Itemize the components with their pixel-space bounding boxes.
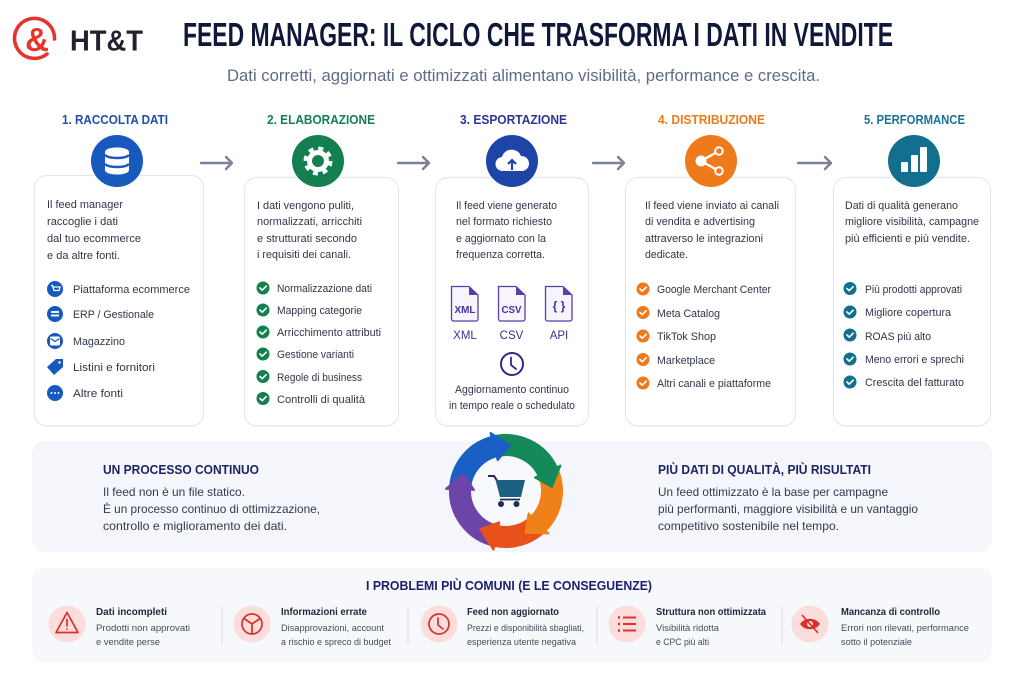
item: informazioni errate: Disapprovazioni, account: [281, 623, 384, 634]
text: description: frequenza corretta.: [456, 249, 545, 261]
list: attività: Controlli di qualità: [277, 394, 366, 406]
list: risultati: Crescita del fatturato: [865, 377, 964, 389]
panel: 1 raccolta dati: [34, 113, 204, 426]
item: informazioni errate: Informazioni errate: [281, 607, 367, 618]
text: più dati di qualità: Un feed ottimizzato è la base per campagne: [658, 485, 888, 499]
list: fonti: Magazzino: [73, 336, 125, 348]
list: fonti: ERP / Gestionale: [73, 309, 154, 321]
heading: step 1: 1. RACCOLTA DATI: [62, 113, 168, 127]
item: feed non aggiornato: [420, 606, 584, 648]
list: fonti: Piattaforma ecommerce: [73, 284, 190, 296]
list: canali: Google Merchant Center: [657, 284, 771, 296]
list: attività: Mapping categorie: [277, 305, 362, 317]
panel: processo continuo: [32, 433, 992, 552]
heading: step 5: 5. PERFORMANCE: [864, 113, 965, 127]
panel: 5 performance: [834, 113, 990, 426]
panel: 4 distribuzione: [626, 113, 796, 426]
list: risultati: Più prodotti approvati: [865, 284, 962, 296]
item: feed non aggiornato: Feed non aggiornato: [467, 607, 559, 618]
subtitle: Dati corretti, aggiornati e ottimizzati alimentano visibilità, performance e crescita.: [227, 67, 820, 85]
list: risultati: Migliore copertura: [865, 307, 952, 319]
list: attività: Normalizzazione dati: [277, 283, 372, 295]
text: description: [645, 200, 779, 261]
text: description: I dati vengono puliti,: [257, 200, 354, 212]
list: canali: [636, 282, 771, 390]
item: struttura non ottimizzata: [608, 606, 766, 648]
text: description: attraverso le integrazioni: [645, 233, 763, 245]
list: fonti: Altre fonti: [73, 388, 123, 400]
text: description: Il feed viene generato: [456, 200, 557, 212]
icon: gear: [292, 135, 344, 187]
text: un processo continuo: [103, 463, 320, 533]
text: description: e aggiornato con la: [456, 233, 547, 245]
item: struttura non ottimizzata: e CPC più alti: [656, 637, 709, 648]
icon: share: [685, 135, 737, 187]
item: dati incompleti: [48, 606, 190, 648]
text: aggiornamento: Aggiornamento continuo: [455, 384, 569, 396]
logo: HT&T: [15, 18, 144, 58]
panel: problemi comuni: [32, 568, 992, 662]
icons: formati file: API: [550, 330, 568, 342]
list: canali: Marketplace: [657, 355, 715, 367]
text: description: dal tuo ecommerce: [47, 233, 141, 245]
text: un processo continuo: È un processo continuo di ottimizzazione,: [103, 502, 320, 516]
icon: ciclo con carrello: [446, 433, 560, 550]
list: canali: Meta Catalog: [657, 308, 720, 320]
heading: step 2: 2. ELABORAZIONE: [267, 113, 375, 127]
icons: formati file: XML: [453, 330, 477, 342]
text: un processo continuo: UN PROCESSO CONTINUO: [103, 463, 259, 477]
text: description: [845, 200, 979, 245]
icons: formati file: [452, 286, 572, 342]
item: mancanza di controllo: sotto il potenziale: [841, 637, 912, 648]
item: dati incompleti: Prodotti non approvati: [96, 623, 190, 634]
list: fonti: Listini e fornitori: [73, 362, 155, 374]
text: description: di vendita e advertising: [645, 216, 755, 228]
item: mancanza di controllo: [792, 606, 969, 648]
text: un processo continuo: Il feed non è un file statico.: [103, 485, 245, 499]
text: description: Il feed manager: [47, 199, 123, 211]
text: più dati di qualità: competitivo sostenibile nel tempo.: [658, 519, 839, 533]
item: informazioni errate: [234, 606, 391, 648]
text: un processo continuo: controllo e miglioramento dei dati.: [103, 519, 287, 533]
text: description: [456, 200, 557, 261]
icon: database: [91, 135, 143, 187]
item: feed non aggiornato: esperienza utente negativa: [467, 637, 577, 648]
icon: cloud upload: [486, 135, 538, 187]
item: informazioni errate: a rischio e spreco di budget: [281, 637, 391, 648]
text: più dati di qualità: PIÙ DATI DI QUALITÀ, PIÙ RISULTATI: [658, 462, 871, 477]
list: risultati: ROAS più alto: [865, 331, 931, 343]
text: description: Dati di qualità generano: [845, 200, 958, 212]
logo: HT&T: &: [25, 21, 49, 58]
icons: formati file: CSV: [502, 304, 522, 316]
list: attività: Gestione varianti: [277, 349, 354, 361]
text: description: raccoglie i dati: [47, 216, 118, 228]
list: risultati: Meno errori e sprechi: [865, 354, 964, 366]
text: description: e da altre fonti.: [47, 250, 120, 262]
flow arrows: [201, 157, 831, 169]
item: struttura non ottimizzata: Struttura non ottimizzata: [656, 607, 766, 618]
icon: clock: [501, 353, 523, 375]
list: attività: Regole di business: [277, 372, 362, 384]
item: mancanza di controllo: Errori non rilevati, performance: [841, 623, 969, 634]
list: risultati: [844, 282, 964, 389]
text: description: nel formato richiesto: [456, 216, 552, 228]
text: aggiornamento: [449, 384, 575, 412]
item: dati incompleti: Dati incompleti: [96, 607, 167, 618]
heading: problemi: I PROBLEMI PIÙ COMUNI (E LE CONSEGUENZE): [366, 578, 652, 593]
text: description: e strutturati secondo: [257, 233, 357, 245]
text: description: Il feed viene inviato ai canali: [645, 200, 779, 212]
list: attività: Arricchimento attributi: [277, 327, 381, 339]
text: description: dedicate.: [645, 249, 688, 261]
text: description: [257, 200, 362, 261]
icons: formati file: { }: [553, 299, 566, 313]
text: description: normalizzati, arricchiti: [257, 216, 362, 228]
text: description: migliore visibilità, campagne: [845, 216, 979, 228]
item: struttura non ottimizzata: Visibilità ridotta: [656, 623, 720, 634]
text: più dati di qualità: più performanti, maggiore visibilità e un vantaggio: [658, 502, 918, 516]
text: più dati di qualità: [658, 462, 918, 533]
list: fonti: [47, 281, 190, 401]
panel: 3 esportazione: [436, 113, 588, 426]
list: attività: [256, 282, 381, 406]
heading: step 4: 4. DISTRIBUZIONE: [658, 113, 765, 127]
logo: HT&T: HT&T: [70, 26, 144, 58]
panel: 2 elaborazione: [244, 113, 398, 426]
icons: formati file: XML: [454, 304, 476, 316]
text: description: i requisiti dei canali.: [257, 249, 351, 261]
text: description: più efficienti e più vendite.: [845, 233, 970, 245]
heading: step 3: 3. ESPORTAZIONE: [460, 113, 567, 127]
item: dati incompleti: e vendite perse: [96, 637, 160, 648]
text: description: [47, 199, 141, 262]
list: canali: TikTok Shop: [657, 331, 716, 343]
item: feed non aggiornato: Prezzi e disponibilità sbagliati,: [467, 623, 584, 634]
list: canali: Altri canali e piattaforme: [657, 378, 771, 390]
icon: bars: [888, 135, 940, 187]
text: aggiornamento: in tempo reale o schedulato: [449, 400, 575, 412]
icons: formati file: CSV: [500, 330, 524, 342]
item: mancanza di controllo: Mancanza di controllo: [841, 607, 940, 618]
